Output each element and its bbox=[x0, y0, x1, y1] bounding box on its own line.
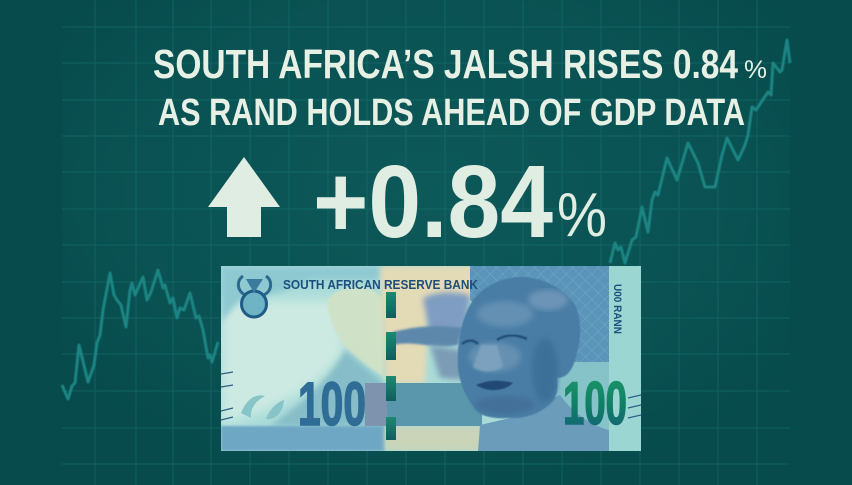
nose bbox=[473, 345, 503, 371]
right tick marks bbox=[628, 395, 641, 418]
security thread dashes bbox=[386, 292, 396, 440]
blue band left of thread bbox=[365, 383, 387, 426]
vertical denomination text: U00 RANN bbox=[611, 284, 623, 334]
right value 100: 100 bbox=[563, 370, 627, 437]
face shadow right bbox=[532, 338, 558, 402]
right hatched pattern bbox=[470, 266, 609, 365]
small wave motif bbox=[241, 395, 284, 419]
dark streak bbox=[393, 326, 462, 346]
bank name: SOUTH AFRICAN RESERVE BANK bbox=[283, 277, 479, 292]
teal wash top left bbox=[221, 266, 385, 322]
mouth bbox=[476, 381, 513, 390]
crest top bbox=[246, 279, 263, 293]
headline bbox=[153, 41, 767, 134]
figure percent sign: % bbox=[557, 181, 607, 250]
crest wreath bbox=[238, 276, 271, 295]
crest shield bbox=[242, 291, 266, 317]
note paper base bbox=[221, 266, 556, 451]
peach centre area bbox=[380, 266, 478, 384]
mauve wash beside portrait bbox=[423, 292, 470, 335]
blue band right of thread bbox=[387, 383, 482, 426]
headline line 1 percent sign: % bbox=[744, 56, 767, 84]
lower mist bbox=[430, 345, 465, 380]
bottom right pattern bbox=[480, 430, 609, 451]
bottom left blue pattern bbox=[221, 426, 385, 451]
figure digits: +0.84 bbox=[313, 144, 553, 259]
shoulders bbox=[478, 395, 609, 451]
right pale strip bbox=[609, 266, 641, 451]
banknote bbox=[221, 266, 641, 451]
cheek highlight bbox=[469, 342, 521, 372]
head bbox=[458, 277, 580, 418]
eyes bbox=[462, 335, 527, 344]
big percentage figure bbox=[313, 144, 607, 259]
headline line 1: SOUTH AFRICA’S JALSH RISES 0.84 bbox=[153, 41, 738, 87]
right lower teal area bbox=[556, 362, 609, 432]
chin shadow bbox=[478, 396, 532, 414]
portrait bbox=[458, 277, 609, 451]
leaf swirl bbox=[327, 287, 383, 376]
bottom centre pale area bbox=[385, 426, 485, 451]
hair highlight bbox=[528, 290, 568, 310]
teal area behind left 100 bbox=[270, 350, 385, 426]
forehead highlight bbox=[477, 301, 533, 327]
left tick marks bbox=[221, 372, 233, 420]
left watermark panel bbox=[221, 300, 345, 425]
line chart: left segment bbox=[62, 270, 218, 399]
icon: coat of arms bbox=[238, 276, 271, 317]
icon: up arrow bbox=[208, 157, 280, 237]
left value 100: 100 bbox=[298, 370, 366, 438]
line chart: right segment bbox=[610, 40, 790, 263]
